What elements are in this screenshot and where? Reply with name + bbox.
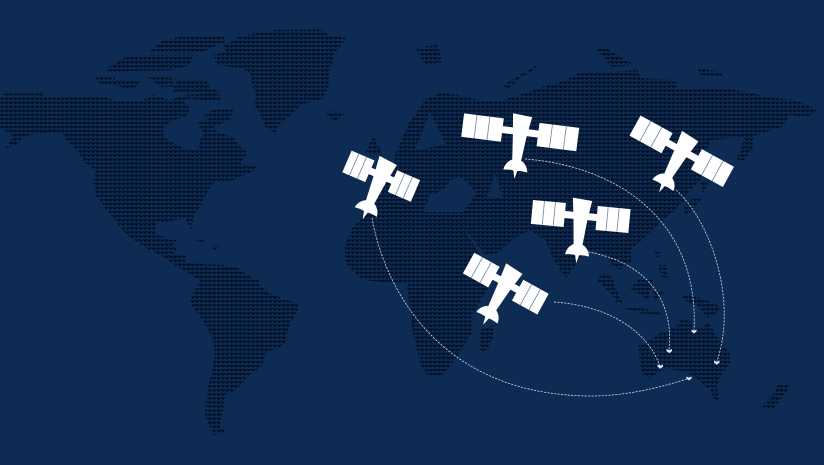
arrowhead 5 [658,364,663,369]
satellite: north-east [612,110,737,218]
satellite: middle [527,194,631,268]
satellite: south [446,247,552,345]
connection arcs from satellites to Australia [372,159,724,396]
arrowhead 2 [692,330,696,334]
arc: north-east satellite [676,190,724,361]
arc: top satellite [525,159,694,331]
arc: south satellite [554,302,660,366]
satellite: west [328,145,423,234]
arc: middle satellite [588,252,670,350]
arrowhead 1 [686,376,692,380]
arrowheads on Australia [658,330,720,380]
arc: west satellite [372,218,690,396]
arrowhead 4 [666,349,672,353]
arrowhead 3 [714,360,720,365]
satellite: top [457,107,580,186]
